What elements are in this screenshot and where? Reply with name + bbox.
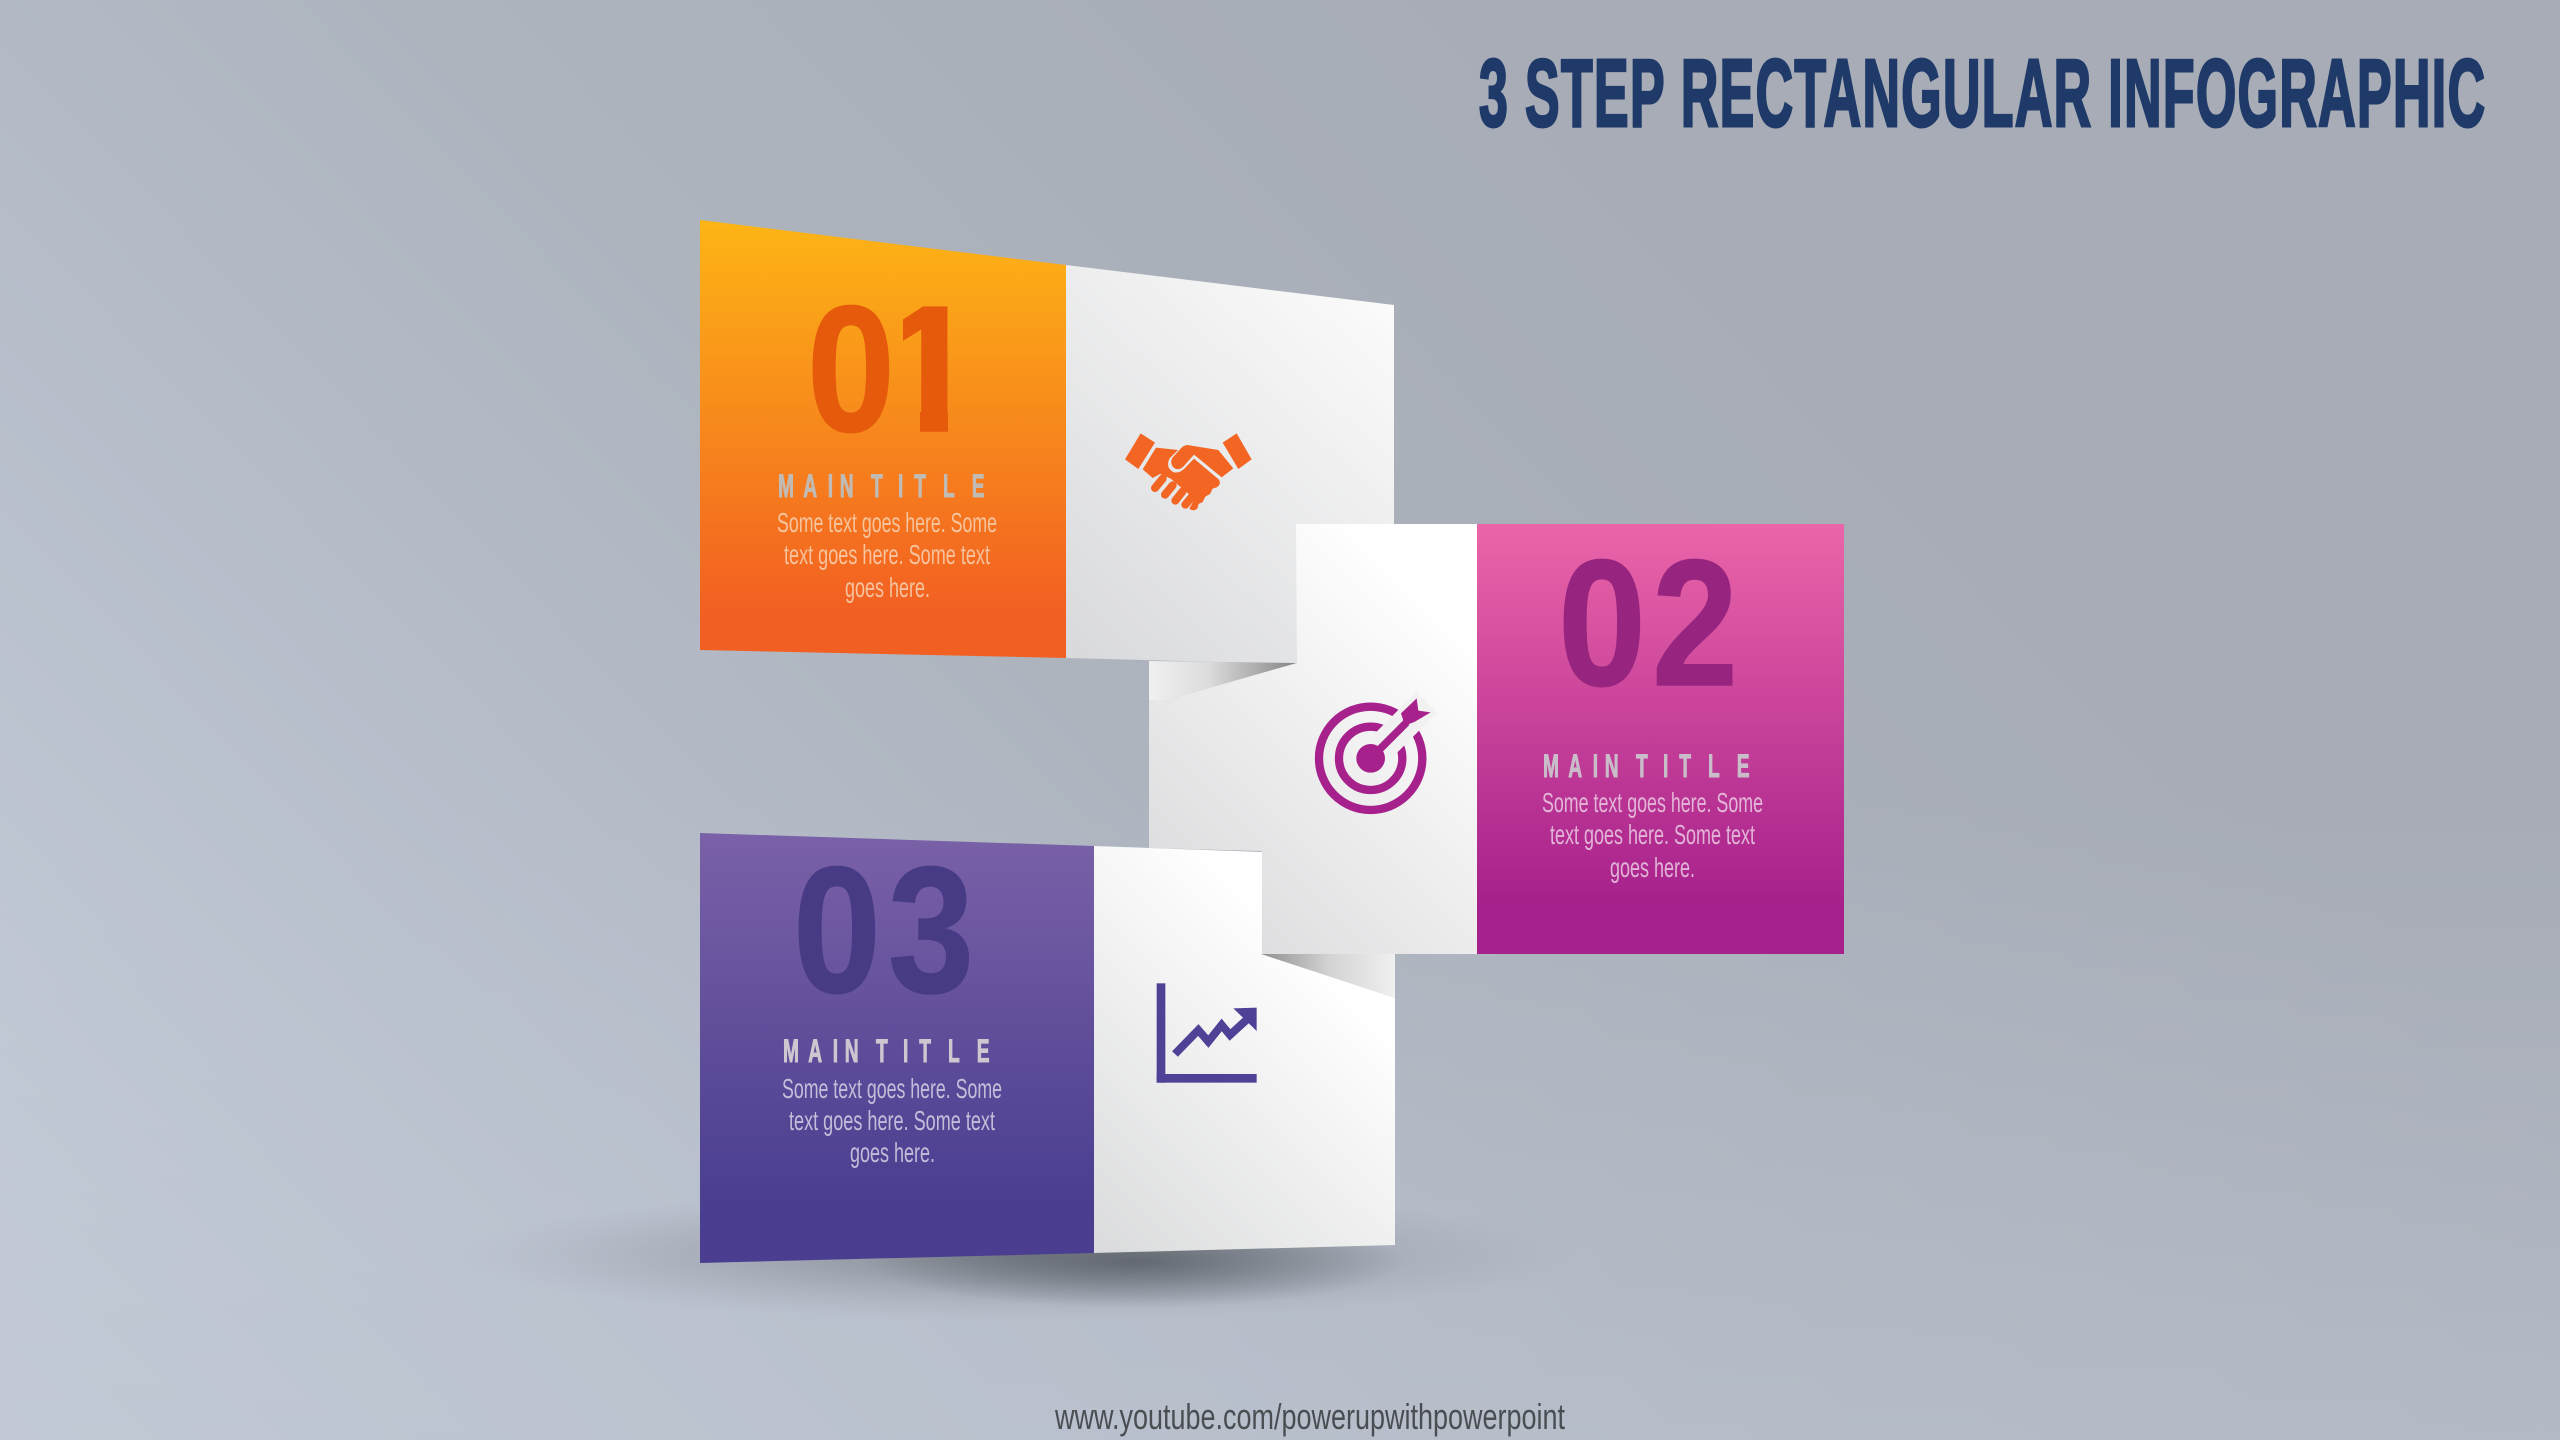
orange panel 1 [700, 220, 1066, 658]
number 03 [793, 830, 974, 1031]
footer url: www.youtube.com/powerupwithpowerpoint [1054, 1396, 1565, 1437]
body text 1: Some text goes here. Some [777, 507, 997, 538]
number 02: 2 [1652, 523, 1738, 724]
number 03: 3 [888, 830, 974, 1031]
number 02: 0 [1558, 523, 1646, 724]
body text 1 [777, 507, 997, 603]
body text 2: Some text goes here. Some [1542, 787, 1763, 818]
heading 2: MAIN TITLE [1543, 748, 1750, 784]
number 01 [812, 304, 948, 434]
body text 1: goes here. [845, 572, 930, 603]
body text 3: goes here. [850, 1137, 935, 1168]
body text 2 [1542, 787, 1763, 883]
icon: target [1319, 698, 1431, 810]
title: 3 STEP RECTANGULAR INFOGRAPHIC [1479, 40, 2485, 147]
white fold panel 1 [1066, 265, 1394, 664]
number 01: 0 [807, 269, 895, 470]
icon: growth chart [1157, 983, 1257, 1083]
body text 3: text goes here. Some text [789, 1105, 995, 1136]
purple panel 3 [700, 833, 1094, 1263]
white fold panel 2 [1149, 524, 1477, 954]
panel: step 3 [700, 830, 1395, 1263]
body text 3: Some text goes here. Some [782, 1073, 1002, 1104]
fold shadow lower [1261, 954, 1395, 998]
body text 2: goes here. [1610, 852, 1695, 883]
panel: step 1 [700, 220, 1394, 664]
heading 1: MAIN TITLE [778, 468, 985, 504]
body text 3 [782, 1073, 1002, 1168]
white fold panel 3 [1094, 846, 1395, 1253]
panel: step 2 [1149, 523, 1844, 954]
icon: handshake [1125, 433, 1252, 510]
number 02 [1558, 523, 1738, 724]
heading 3: MAIN TITLE [783, 1033, 990, 1069]
pink panel 2 [1477, 524, 1844, 954]
body text 1: text goes here. Some text [784, 539, 990, 570]
number 03: 0 [793, 830, 881, 1031]
floor shadow [460, 1189, 1580, 1321]
fold shadow upper [1149, 661, 1297, 702]
number 01: 1 [880, 269, 980, 470]
body text 2: text goes here. Some text [1550, 819, 1755, 850]
